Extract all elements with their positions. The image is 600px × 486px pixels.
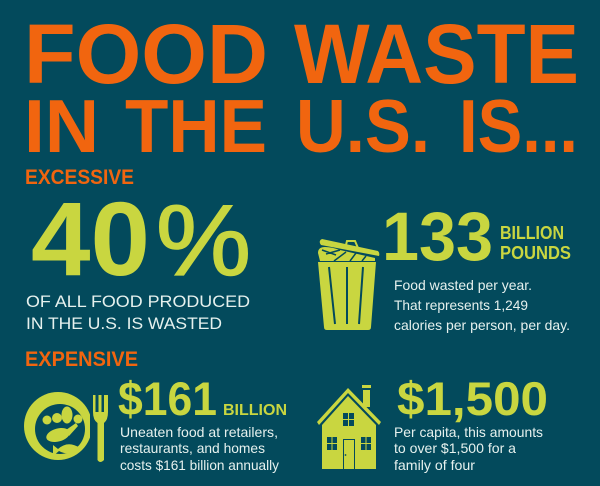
- stat: $161 billion: BILLION: [223, 402, 287, 419]
- stat: 133 billion pounds: 133: [382, 198, 493, 275]
- icon: plate and fork: [24, 390, 110, 465]
- stat: 40%: 40: [31, 181, 150, 298]
- text: per capita: Per capita, this amounts: [394, 424, 543, 440]
- title: IS...: [459, 84, 578, 168]
- text: of all food produced: IN THE U.S. IS WASTED: [26, 314, 222, 333]
- title: [24, 7, 579, 168]
- text: per capita: to over $1,500 for a: [394, 440, 516, 456]
- text: uneaten food: restaurants, and homes: [120, 440, 265, 456]
- stat: 40%: %: [156, 185, 251, 297]
- title: U.S.: [296, 84, 430, 168]
- stat: 133 billion pounds: POUNDS: [500, 243, 571, 263]
- title: FOOD: [24, 7, 268, 101]
- text: uneaten food: costs $161 billion annually: [120, 457, 279, 473]
- title: THE: [125, 84, 267, 168]
- stat: $161 billion: $161: [118, 372, 217, 425]
- text: food wasted per year: That represents 1,249: [394, 297, 528, 313]
- text: per capita: family of four: [394, 457, 475, 473]
- text: of all food produced: [26, 292, 250, 333]
- stat: 133 billion pounds: BILLION: [500, 223, 564, 243]
- text: per capita: [394, 424, 543, 473]
- stat: 40%: [31, 181, 251, 298]
- text: food wasted per year: Food wasted per year.: [394, 277, 532, 293]
- icon: house: [317, 385, 381, 469]
- title: IN: [24, 84, 99, 168]
- title: WASTE: [294, 7, 579, 101]
- heading: excessive: EXCESSIVE: [25, 166, 134, 189]
- heading: expensive: EXPENSIVE: [25, 348, 138, 371]
- stat: $1,500: $1,500: [397, 372, 548, 425]
- text: food wasted per year: calories per person, per day.: [394, 317, 570, 333]
- text: food wasted per year: [394, 277, 570, 333]
- text: uneaten food: [120, 424, 279, 473]
- icon: trash can: [318, 239, 379, 330]
- stat: $161 billion: [118, 372, 287, 425]
- text: uneaten food: Uneaten food at retailers,: [120, 424, 278, 440]
- text: of all food produced: OF ALL FOOD PRODUCED: [26, 292, 250, 311]
- stat: 133 billion pounds: [382, 198, 571, 275]
